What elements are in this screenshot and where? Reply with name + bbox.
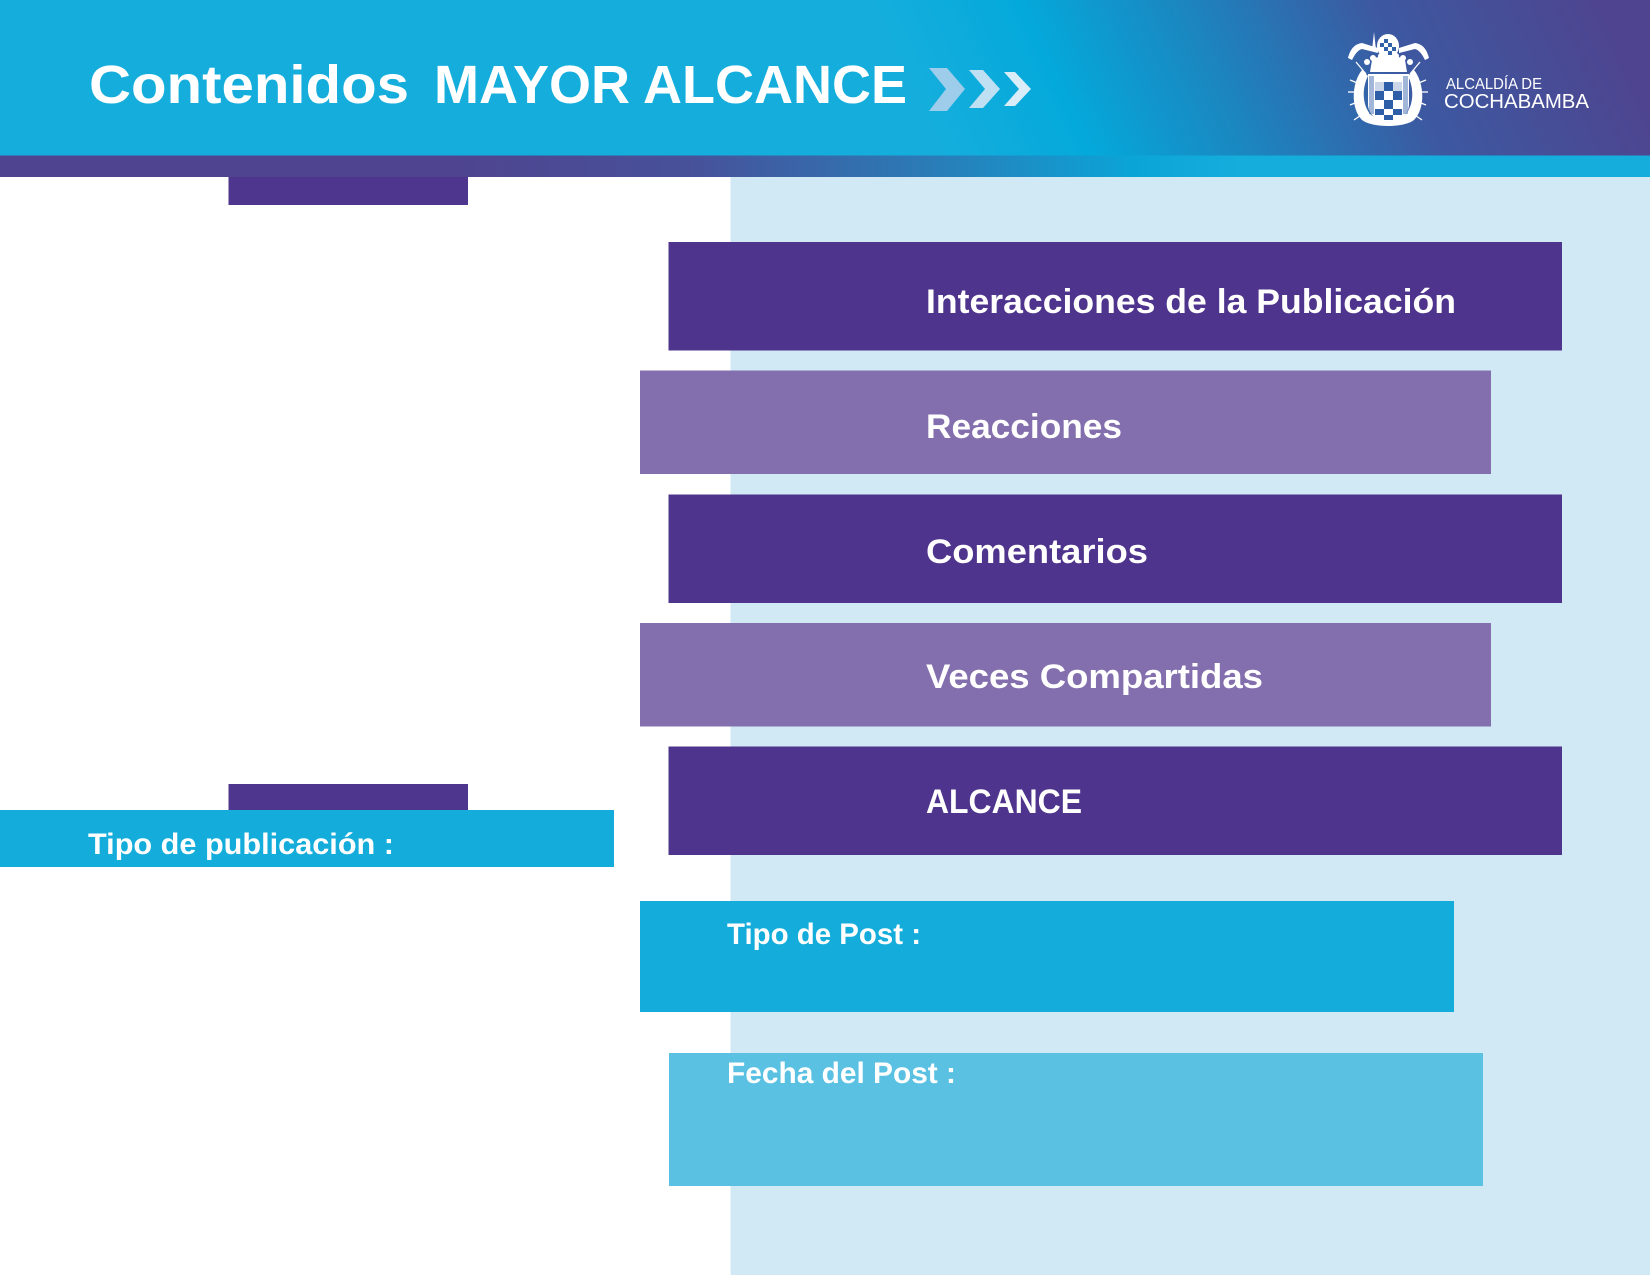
icon: coat of arms <box>1348 32 1429 126</box>
ribbon and crest top <box>1348 32 1429 72</box>
row: alcance <box>668 746 1562 855</box>
row: comentarios: Comentarios <box>926 533 1148 571</box>
row: veces compartidas: Veces Compartidas <box>926 658 1263 696</box>
checkerboard <box>1369 76 1408 120</box>
header banner <box>0 0 1650 177</box>
logo text: COCHABAMBA <box>1444 91 1590 113</box>
shield <box>1368 74 1409 123</box>
logo text: ALCALDÍA DE <box>1446 76 1542 93</box>
panel: fecha del post: Fecha del Post : <box>727 1057 956 1090</box>
panel: tipo de post <box>640 901 1454 1012</box>
icon: chevron arrows <box>929 68 1031 111</box>
logo text <box>1444 76 1590 113</box>
panel: tipo de publicacion: Tipo de publicación : <box>88 828 394 861</box>
title: Contenidos <box>89 55 409 115</box>
purple tab lower left <box>228 784 468 810</box>
panel: tipo de publicacion <box>0 810 614 867</box>
row: interacciones <box>668 242 1562 350</box>
row: reacciones <box>640 370 1491 474</box>
outer ring <box>1354 70 1422 126</box>
row: interacciones: Interacciones de la Publicación <box>926 283 1456 321</box>
panel: fecha del post <box>669 1053 1483 1186</box>
panel: tipo de post: Tipo de Post : <box>727 918 921 951</box>
row: reacciones: Reacciones <box>926 408 1122 446</box>
row: alcance: ALCANCE <box>926 783 1082 821</box>
row: veces compartidas <box>640 623 1491 726</box>
purple tab top <box>228 177 468 205</box>
title: MAYOR ALCANCE <box>434 55 907 115</box>
title <box>89 55 907 115</box>
row: comentarios <box>668 494 1562 603</box>
light blue background panel <box>730 177 1650 1275</box>
